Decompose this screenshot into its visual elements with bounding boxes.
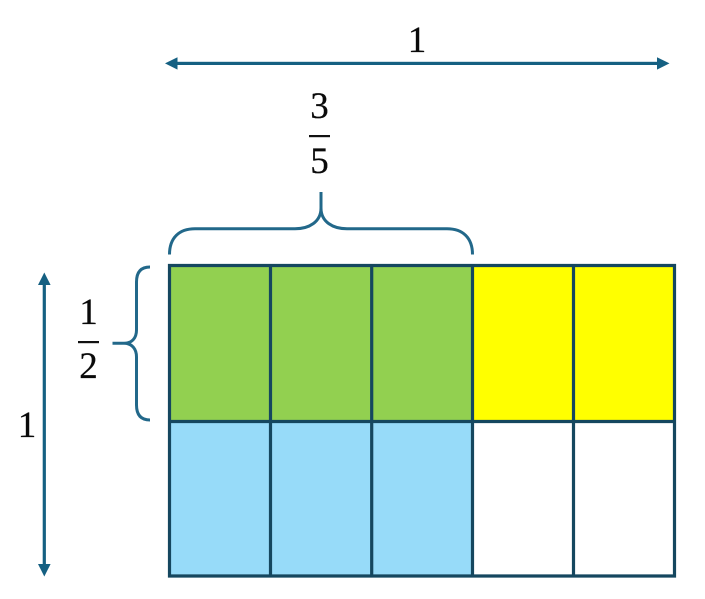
green cells: overlap of one half and three fifths (170, 266, 472, 422)
fraction label: 3/5 (309, 86, 330, 182)
grid lines (170, 266, 674, 576)
label: left 1: 1 (18, 405, 36, 446)
label: top 1: 1 (408, 20, 426, 61)
fraction label: 3/5: 3 (310, 86, 329, 127)
fraction label: 1/2: 1 (79, 292, 98, 333)
fraction label: 1/2: 2 (79, 346, 98, 387)
vertical arrow: height of 1 (38, 272, 51, 576)
fraction label: 3/5: 5 (310, 141, 329, 182)
blue cells: three fifths only (170, 422, 472, 576)
fraction label: 1/2 (78, 292, 99, 387)
top brace: three fifths (170, 192, 472, 254)
horizontal arrow: width of 1 (165, 57, 670, 70)
white cells: unshaded (472, 422, 674, 576)
area model grid (170, 266, 674, 576)
left brace: one half (112, 267, 150, 420)
yellow cells: one half only (472, 266, 674, 422)
